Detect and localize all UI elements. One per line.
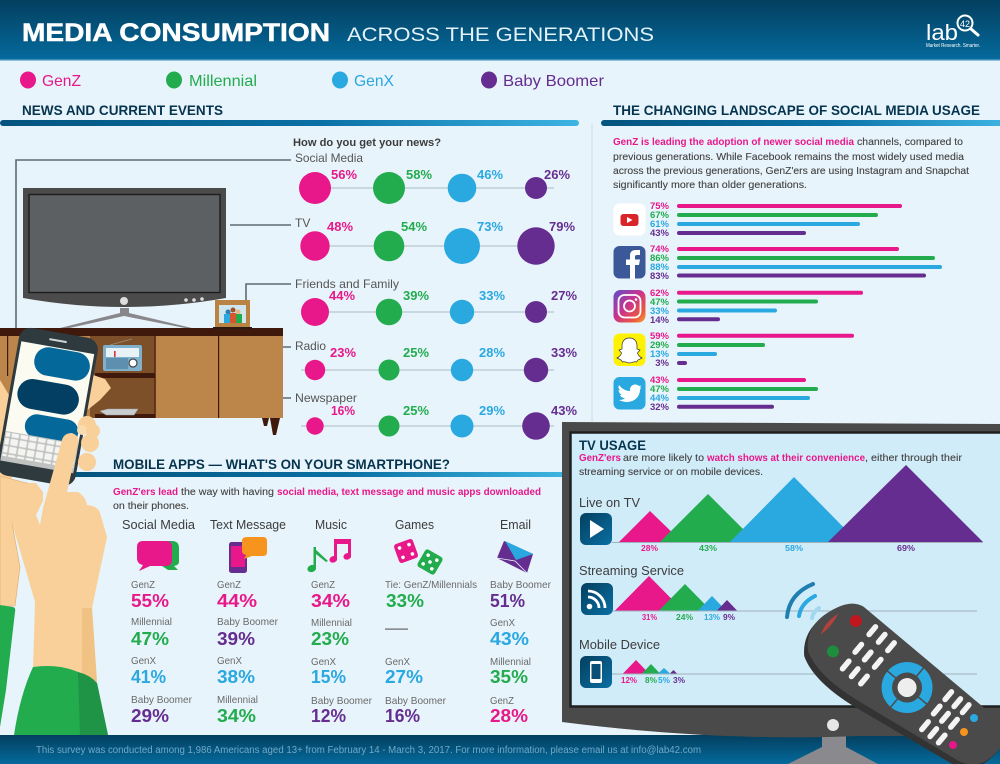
chart: streaming service: Streaming Service — [579, 564, 684, 578]
row: instagram: 33% — [650, 306, 670, 317]
row: instagram: 14% — [650, 315, 670, 326]
chart: mobile device: 8% — [645, 675, 657, 685]
row: social media — [295, 151, 570, 204]
illustration: right sleeve — [14, 666, 108, 735]
column: music apps: 23% — [311, 629, 349, 649]
column: music apps: 15% — [311, 667, 346, 687]
row: youtube: 67% — [650, 210, 670, 221]
column: music apps: GenX — [311, 657, 336, 668]
column: social media apps: 55% — [131, 591, 169, 611]
column: social media apps: 41% — [131, 667, 166, 687]
chart: streaming service: 9% — [723, 612, 735, 622]
illustration: holding hand behind phone — [0, 374, 111, 606]
column: social media apps: Baby Boomer — [131, 695, 193, 706]
row: newspaper: 29% — [479, 404, 505, 418]
text: tv usage intro: , either through their — [865, 453, 963, 464]
row: friends and family: 39% — [403, 289, 429, 303]
column: social media apps: GenX — [131, 656, 156, 667]
illustration: television — [23, 188, 226, 329]
row: friends and family: 44% — [329, 289, 355, 303]
column: email apps: Email — [500, 518, 531, 532]
column: games apps: Tie: GenZ/Millennials — [385, 580, 477, 591]
chart: how do you get your news — [293, 137, 577, 440]
chart: streaming service: 24% — [676, 612, 693, 622]
row: facebook: 88% — [650, 262, 670, 273]
column: text message apps: GenZ — [217, 580, 241, 591]
column: music apps: Baby Boomer — [311, 696, 373, 707]
text: social media intro: significantly more than older generations. — [613, 180, 807, 191]
column: social media apps: GenZ — [131, 580, 155, 591]
column: text message apps: Text Message — [210, 518, 286, 532]
row: radio: 33% — [551, 346, 577, 360]
column: music apps: 12% — [311, 706, 346, 726]
text: tv usage intro: GenZ'ers — [579, 453, 621, 464]
chart: mobile device — [579, 638, 977, 688]
tv frame — [562, 422, 1000, 737]
column: email apps: 51% — [490, 591, 525, 611]
row: facebook: 86% — [650, 253, 670, 264]
row: facebook: 74% — [650, 244, 670, 255]
row: twitter: 32% — [650, 402, 670, 413]
column: music apps: GenZ — [311, 580, 335, 591]
column: email apps — [490, 518, 552, 726]
row: radio: 28% — [479, 346, 505, 360]
row: social media: 56% — [331, 168, 357, 182]
heading: news and current events — [0, 102, 579, 126]
column: text message apps: 44% — [217, 591, 257, 611]
column: games apps — [385, 518, 477, 726]
text: social media intro: GenZ is leading the adoption of newer social media — [613, 137, 854, 148]
column: social media apps — [122, 518, 195, 726]
row: social media: 58% — [406, 168, 432, 182]
tv screen — [570, 432, 1000, 706]
chart: live on tv: 28% — [641, 543, 658, 553]
column: text message apps — [210, 518, 286, 726]
row: youtube: 61% — [650, 219, 670, 230]
column: text message apps: 34% — [217, 706, 256, 726]
text: mobile apps intro: social media, text message and music apps downloaded — [277, 487, 541, 498]
column: text message apps: Baby Boomer — [217, 617, 279, 628]
icon: remote signal arcs — [787, 584, 819, 618]
phone message bubbles — [10, 343, 92, 445]
chart: mobile device: 12% — [621, 675, 637, 685]
text: mobile apps intro: the way with having — [181, 487, 274, 498]
column: games apps: Games — [395, 518, 434, 532]
chart: live on tv: 43% — [699, 543, 717, 553]
column: social media apps: 29% — [131, 706, 169, 726]
text: tv usage intro: watch shows at their convenience — [706, 453, 865, 464]
row: instagram: 62% — [650, 288, 670, 299]
column: text message apps: 38% — [217, 667, 255, 687]
row: social media: 26% — [544, 168, 570, 182]
legend: Baby Boomer — [503, 73, 605, 90]
heading: news and current events: NEWS AND CURRENT EVENTS — [22, 102, 223, 118]
panel: tv usage — [562, 422, 1000, 764]
text: tv usage intro: are more likely to — [623, 453, 704, 464]
row: tv: 54% — [401, 220, 427, 234]
logo: lab42: Market Research. Smarter. — [926, 43, 980, 49]
text: social media intro: previous generations. While Facebook remains the most widely used media — [613, 152, 964, 163]
logo: lab42: 42 — [960, 19, 970, 29]
text: tv usage intro — [579, 453, 963, 478]
row: youtube: 43% — [650, 228, 670, 239]
panel: news illustration leader lines — [16, 160, 291, 410]
row: snapchat: 59% — [650, 331, 670, 342]
column: social media apps: Millennial — [131, 617, 172, 628]
column: email apps: GenZ — [490, 696, 514, 707]
row: radio — [295, 339, 577, 382]
illustration: fingers gripping phone — [77, 416, 100, 471]
logo: lab42: lab — [926, 20, 958, 45]
row: newspaper — [295, 391, 577, 440]
column: music apps: Music — [315, 518, 347, 532]
row: twitter: 43% — [650, 375, 670, 386]
illustration: left sleeve — [0, 605, 15, 727]
legend: Millennial — [189, 73, 257, 90]
row: friends and family: 33% — [479, 289, 505, 303]
tv stand — [788, 735, 878, 764]
column: games apps: 33% — [386, 591, 424, 611]
row: friends and family — [295, 277, 577, 326]
chart: mobile device: Mobile Device — [579, 638, 660, 652]
row: tv — [295, 216, 575, 265]
footer band: This survey was conducted among 1,986 Americans aged 13+ from February 14 - March 3, 2017. For more information, please email us at info@lab42.com — [36, 745, 701, 756]
chart: mobile device: 3% — [673, 675, 685, 685]
column: text message apps: GenX — [217, 656, 242, 667]
column: email apps: GenX — [490, 618, 515, 629]
row: snapchat — [614, 331, 854, 369]
heading: tv usage: TV USAGE — [579, 437, 646, 453]
heading: social media landscape: THE CHANGING LANDSCAPE OF SOCIAL MEDIA USAGE — [613, 102, 980, 118]
subtitle: ACROSS THE GENERATIONS — [347, 25, 654, 46]
header band — [0, 0, 1000, 60]
row: tv: 48% — [327, 220, 353, 234]
row: newspaper: Newspaper — [295, 391, 357, 405]
row: facebook: 83% — [650, 271, 670, 282]
row: friends and family: Friends and Family — [295, 277, 399, 291]
text: mobile apps intro: GenZ'ers lead — [113, 487, 178, 498]
title: MEDIA CONSUMPTION — [22, 19, 330, 47]
chart: live on tv: Live on TV — [579, 496, 641, 510]
row: tv: TV — [295, 216, 310, 230]
row: twitter: 47% — [650, 384, 670, 395]
chart: streaming service: 13% — [704, 612, 720, 622]
icon: music notes — [307, 539, 351, 572]
chart: live on tv: 69% — [897, 543, 915, 553]
row: newspaper: 43% — [551, 404, 577, 418]
row: tv: 79% — [549, 220, 575, 234]
chart: live on tv — [579, 465, 983, 553]
column: social media apps: 47% — [131, 629, 169, 649]
chart: mobile device: 5% — [658, 675, 670, 685]
row: radio: 25% — [403, 346, 429, 360]
row: facebook — [614, 244, 942, 282]
chart: live on tv: 58% — [785, 543, 803, 553]
heading: mobile apps: MOBILE APPS — WHAT'S ON YOUR SMARTPHONE? — [113, 456, 450, 472]
column: games apps: Baby Boomer — [385, 696, 447, 707]
text: mobile apps intro: on their phones. — [113, 501, 189, 512]
question text: How do you get your news? — [293, 137, 441, 149]
row: newspaper: 16% — [331, 404, 355, 418]
icon: envelope — [497, 541, 533, 573]
row: newspaper: 25% — [403, 404, 429, 418]
row: radio: Radio — [295, 339, 326, 353]
column: games apps: GenX — [385, 657, 410, 668]
heading: mobile apps — [75, 456, 565, 477]
column: music apps: 34% — [311, 591, 350, 611]
row: snapchat: 13% — [650, 349, 670, 360]
column: music apps — [307, 518, 373, 726]
legend: GenX — [354, 73, 394, 90]
row: youtube: 75% — [650, 201, 670, 212]
logo: lab42 — [926, 16, 980, 49]
row: snapchat: 29% — [650, 340, 670, 351]
column: text message apps: Millennial — [217, 695, 258, 706]
legend — [20, 72, 605, 90]
column: text message apps: 39% — [217, 629, 255, 649]
chart: streaming service: 31% — [642, 612, 657, 622]
icon: chat bubbles — [137, 541, 179, 571]
column: games apps: 27% — [385, 667, 423, 687]
row: twitter: 44% — [650, 393, 670, 404]
illustration: remote control — [789, 590, 1000, 764]
row: twitter — [614, 375, 818, 413]
column: games apps: 16% — [385, 706, 420, 726]
row: social media: 46% — [477, 168, 503, 182]
footer band — [0, 735, 1000, 764]
column: social media apps: Social Media — [122, 518, 195, 532]
row: tv: 73% — [477, 220, 503, 234]
column: music apps: Millennial — [311, 618, 352, 629]
row: youtube — [614, 201, 902, 239]
text: social media intro: channels, compared to — [857, 137, 963, 148]
illustration: smartphone — [0, 326, 100, 488]
column: email apps: 28% — [490, 706, 528, 726]
row: radio: 23% — [330, 346, 356, 360]
row: instagram: 47% — [650, 297, 670, 308]
column: email apps: Millennial — [490, 657, 531, 668]
row: social media: Social Media — [295, 151, 363, 165]
icon: phone and speech bubble — [229, 537, 267, 573]
column: email apps: Baby Boomer — [490, 580, 552, 591]
text: tv usage intro: streaming service or on mobile devices. — [579, 467, 763, 478]
illustration: radio — [103, 339, 142, 371]
heading: social media landscape — [601, 102, 1000, 126]
row: friends and family: 27% — [551, 289, 577, 303]
legend: GenZ — [42, 73, 81, 90]
text: social media intro — [613, 137, 969, 191]
column: email apps: 35% — [490, 667, 528, 687]
illustration: picture frame — [213, 300, 252, 329]
illustration: tapping hand — [12, 433, 107, 682]
row: snapchat: 3% — [655, 358, 670, 369]
illustration: cabinet — [0, 328, 283, 435]
row: instagram — [614, 288, 863, 326]
illustration: newspaper — [100, 409, 138, 415]
icon: dice — [393, 538, 444, 576]
text: mobile apps intro — [113, 487, 541, 512]
chart: social media usage bars — [614, 201, 942, 413]
chart: streaming service — [579, 564, 977, 622]
column: email apps: 43% — [490, 629, 529, 649]
text: social media intro: across the previous generations, GenZ'ers are using Instagram and Snapchat — [613, 166, 969, 177]
